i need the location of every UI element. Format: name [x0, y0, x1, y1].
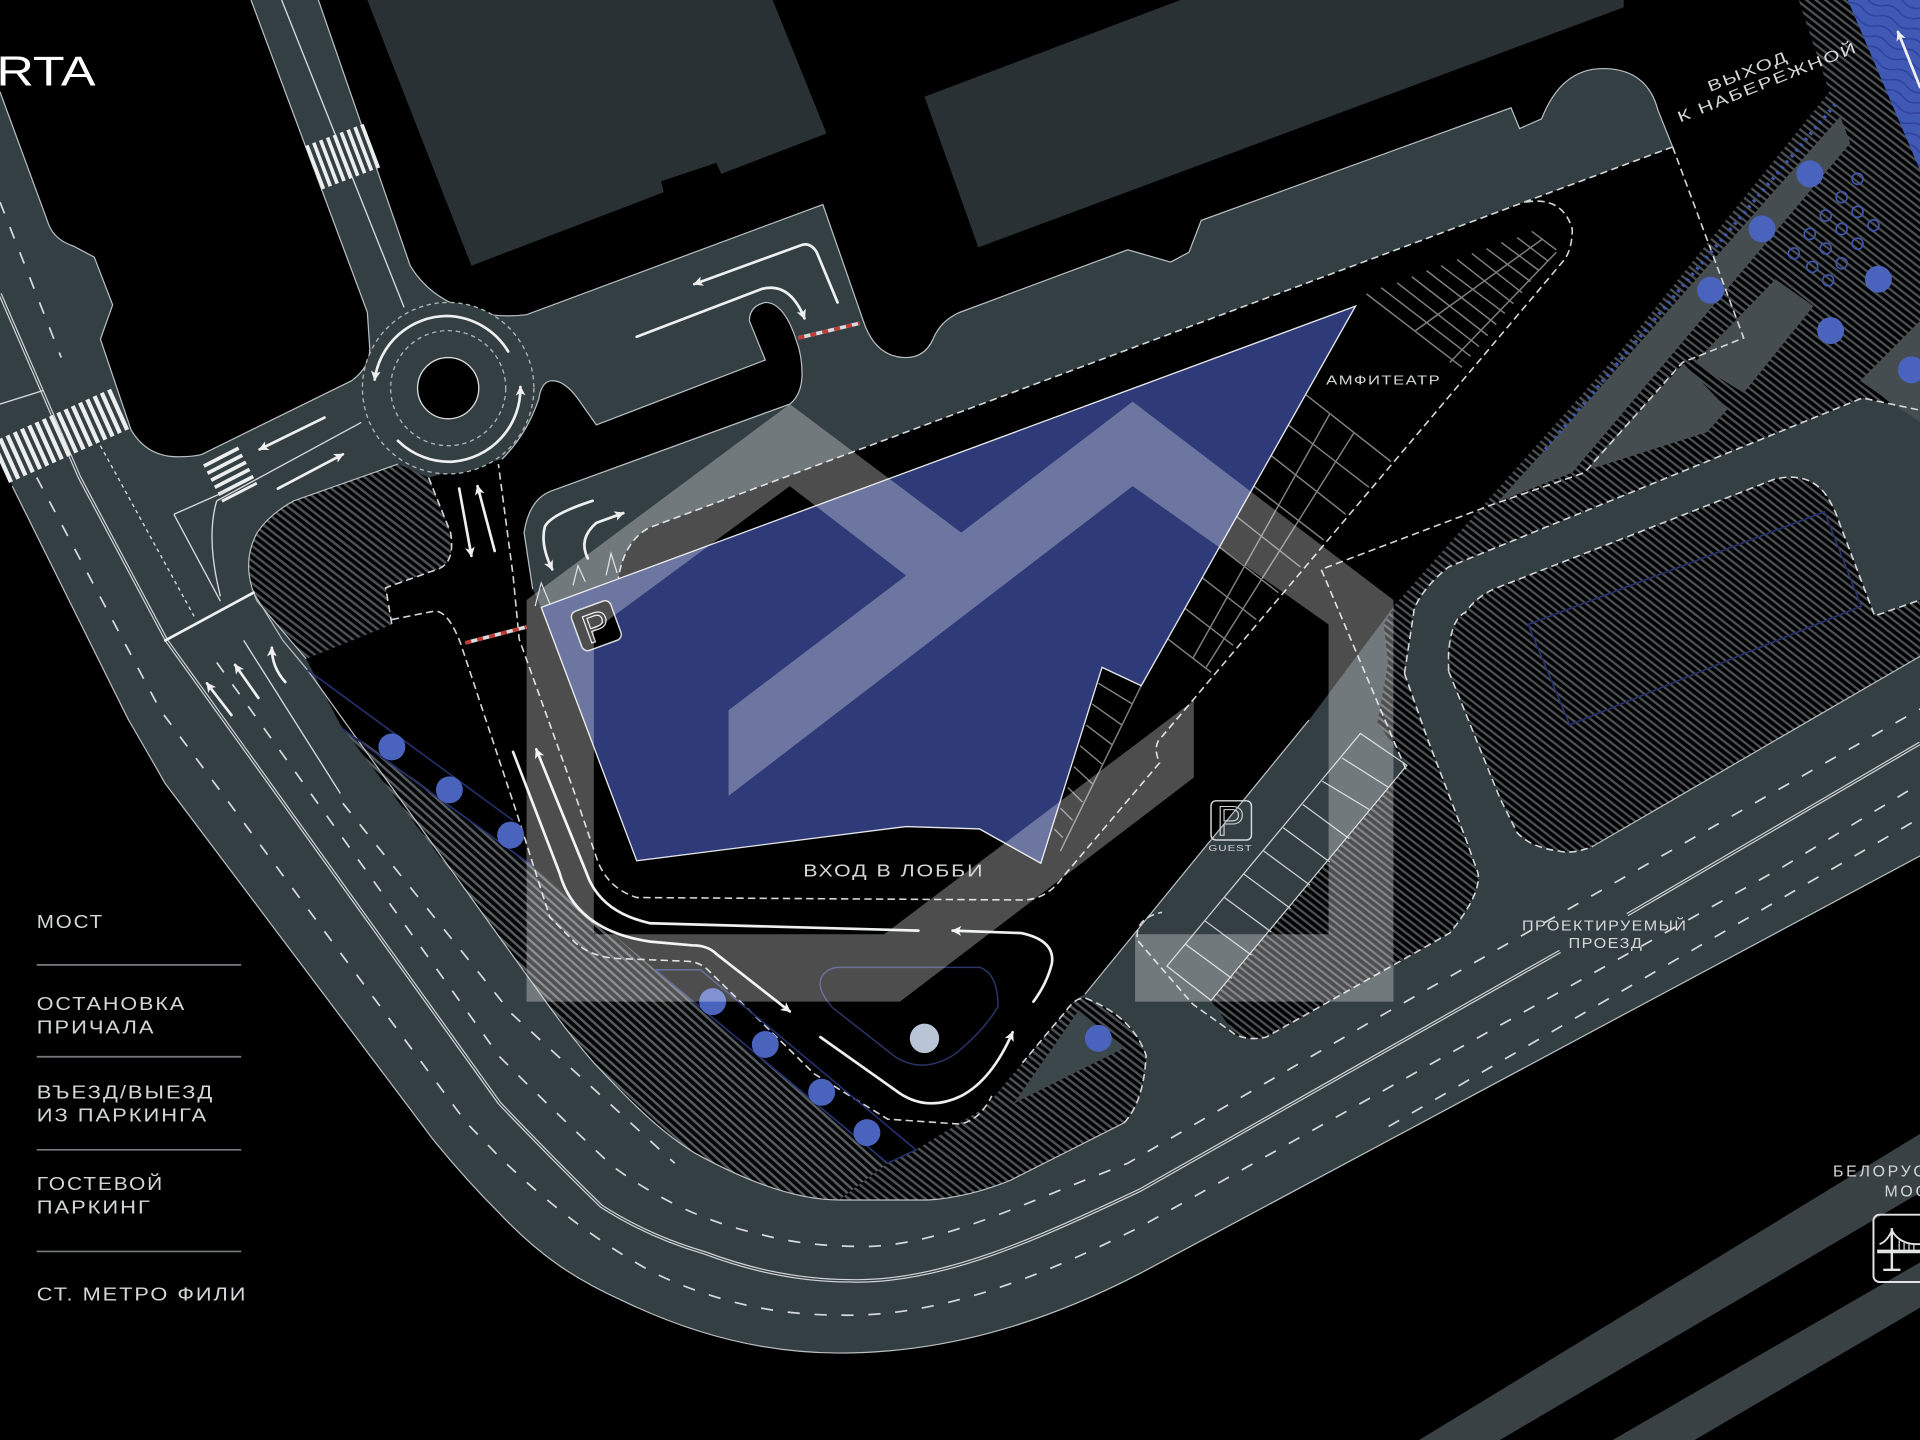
label: projected driveway — [1522, 917, 1687, 952]
icon: guest parking — [1209, 797, 1253, 853]
icon: parking: P — [576, 600, 617, 653]
label: lobby entrance: ВХОД В ЛОББИ — [803, 861, 984, 881]
legend item: pier stop — [37, 993, 186, 1037]
stop lines — [0, 391, 253, 640]
dashed boundaries — [386, 147, 1920, 1124]
legend — [37, 911, 247, 1304]
amphitheatre seating grid — [1054, 231, 1556, 851]
crosswalks — [0, 144, 375, 493]
icon: parking — [569, 598, 624, 655]
lobby drop-off island — [820, 967, 998, 1065]
label: exit to embankment: ВЫХОД — [1705, 48, 1791, 96]
label: exit to embankment — [1669, 23, 1860, 126]
hatched zones — [249, 0, 1920, 1200]
legend item: guest parking: ПАРКИНГ — [37, 1196, 152, 1217]
blue trees — [378, 160, 1920, 1146]
icon: guest parking: GUEST — [1209, 843, 1253, 853]
buildings — [367, 0, 1624, 266]
planted strips — [1014, 116, 1920, 1103]
legend item: metro: СТ. МЕТРО ФИЛИ — [37, 1283, 247, 1304]
parking bars — [535, 553, 617, 606]
legend item: parking entry — [37, 1081, 214, 1126]
legend item: pier stop: ОСТАНОВКА — [37, 993, 186, 1014]
bottom right embankment bands — [1419, 1134, 1920, 1440]
label: amphitheatre: АМФИТЕАТР — [1326, 372, 1441, 387]
legend item: pier stop: ПРИЧАЛА — [37, 1016, 156, 1037]
legend item: parking entry: ИЗ ПАРКИНГА — [37, 1105, 208, 1126]
label: exit to embankment: К НАБЕРЕЖНОЙ — [1675, 38, 1860, 126]
legend item: bridge: МОСТ — [37, 911, 104, 932]
blue tree rings and dotted line — [1545, 104, 1879, 449]
gate markers — [465, 323, 860, 643]
traffic arrows — [207, 244, 1052, 1103]
thin blue tree strips — [307, 512, 1861, 1163]
logo overlay — [527, 402, 1393, 1002]
legend item: guest parking — [37, 1173, 164, 1217]
roundabout — [362, 302, 534, 474]
icon: bridge — [1873, 1215, 1920, 1282]
water channel — [1848, 0, 1920, 170]
guest parking bays — [1167, 733, 1407, 1000]
label: Belorussky bridge — [1833, 1162, 1920, 1200]
icon: guest parking: P — [1217, 797, 1244, 844]
legend item: guest parking: ГОСТЕВОЙ — [37, 1173, 164, 1194]
label: projected driveway: ПРОЕКТИРУЕМЫЙ — [1522, 917, 1687, 935]
main building — [541, 306, 1356, 863]
label: projected driveway: ПРОЕЗД — [1569, 936, 1643, 952]
legend item: parking entry: ВЪЕЗД/ВЫЕЗД — [37, 1081, 214, 1102]
legend divider group — [37, 965, 241, 1251]
